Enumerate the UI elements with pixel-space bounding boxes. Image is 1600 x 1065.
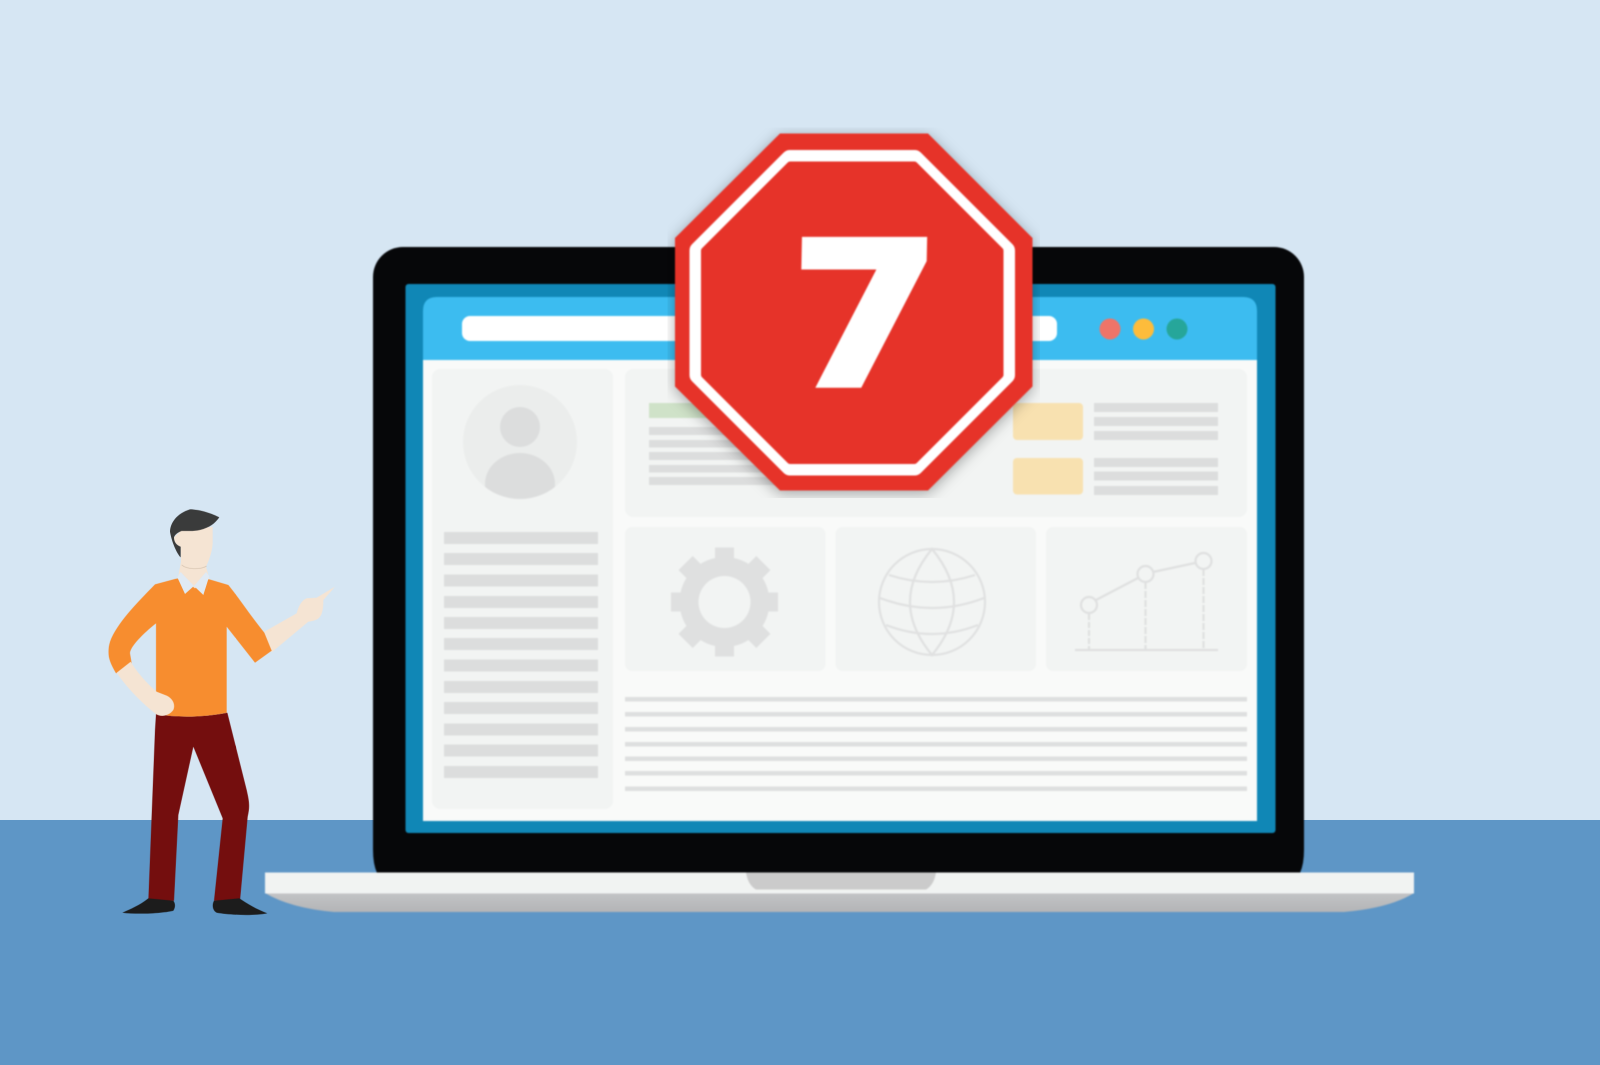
trackpad notch <box>746 872 936 890</box>
base top surface <box>265 872 1414 894</box>
browser header bar <box>423 297 1257 360</box>
panel: profile sidebar <box>443 384 599 779</box>
window control dots <box>1100 318 1188 340</box>
octagon white ring <box>698 159 1006 466</box>
address bar <box>462 316 1057 341</box>
jaw line <box>182 565 207 569</box>
icon: user avatar <box>484 406 556 499</box>
right shoe <box>213 898 267 915</box>
neck and face <box>174 527 213 588</box>
sidebar text lines <box>444 532 598 778</box>
pants <box>148 713 249 901</box>
green heading block <box>649 403 729 418</box>
icon: gear <box>671 548 778 656</box>
line chart <box>1075 553 1218 650</box>
collar <box>177 572 209 595</box>
background: floor <box>0 820 1600 1065</box>
laptop bezel <box>373 247 1304 873</box>
screen page background <box>423 350 1257 821</box>
body text lines <box>625 697 1247 791</box>
icon: globe <box>879 549 985 655</box>
head <box>170 509 219 595</box>
person pointing <box>108 509 335 915</box>
left shoe <box>122 898 175 914</box>
octagon inner face <box>704 164 1000 461</box>
background: sky <box>0 0 1600 820</box>
panel: settings card <box>625 527 826 671</box>
number 7: 7 <box>786 201 943 433</box>
panel: globe card <box>836 527 1036 671</box>
orange thumbnail 2 <box>1013 458 1083 494</box>
browser window <box>423 297 1257 821</box>
panel: chart card <box>1046 527 1247 671</box>
right forearm and pointing hand <box>264 587 335 652</box>
base underside <box>265 893 1414 912</box>
laptop <box>265 247 1414 912</box>
left forearm and hand <box>117 662 174 716</box>
stop sign badge <box>675 134 1032 490</box>
left content lines <box>649 427 779 485</box>
laptop screen frame <box>406 284 1276 833</box>
hair <box>170 509 219 557</box>
laptop base <box>265 872 1414 912</box>
orange thumbnail 1 <box>1013 403 1083 440</box>
right content lines <box>1094 403 1218 495</box>
octagon <box>675 134 1032 490</box>
panel: top content <box>625 369 1247 517</box>
sweater <box>108 578 272 717</box>
